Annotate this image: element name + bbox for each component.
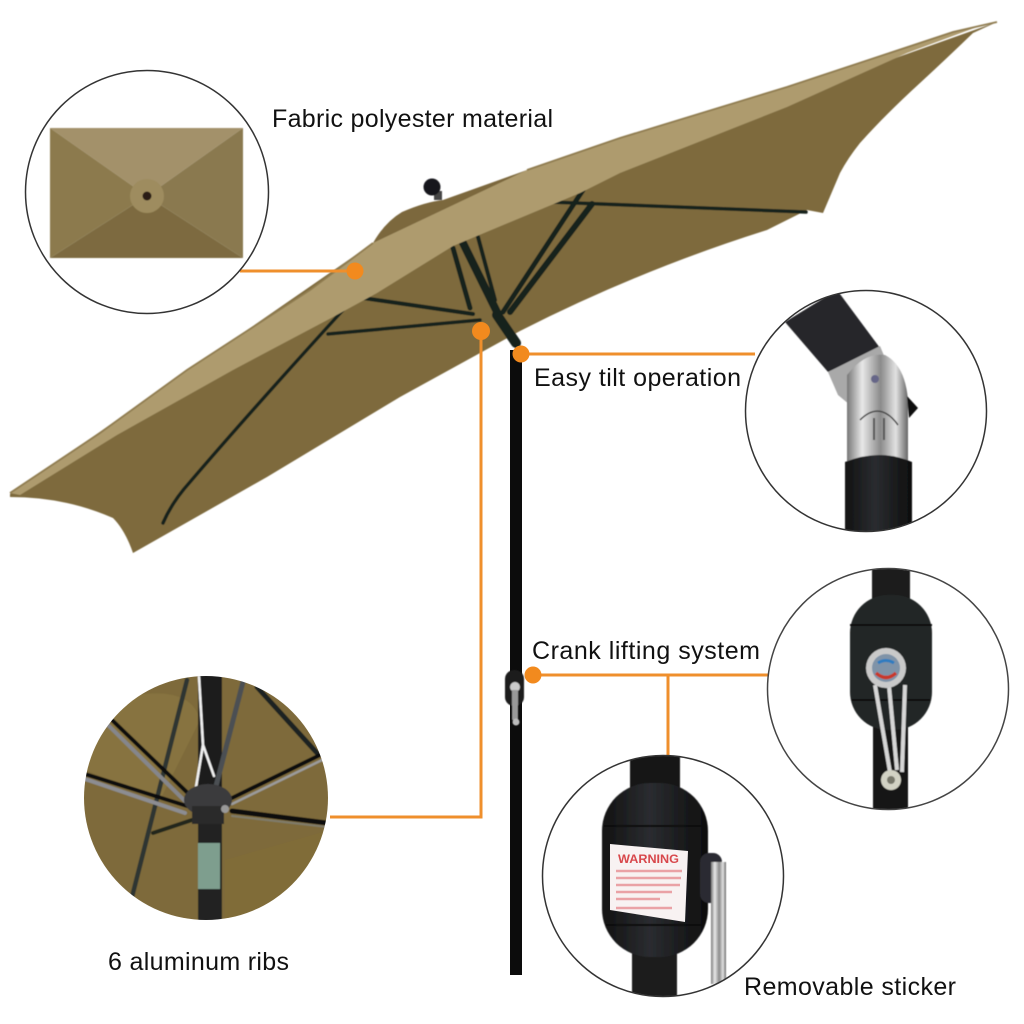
callout dots [346, 262, 542, 684]
callout lines [240, 271, 768, 817]
detail circle: tilt joint [746, 290, 986, 535]
pole [198, 676, 222, 788]
label: fabric: Fabric polyester material [272, 105, 553, 133]
hub [184, 784, 232, 816]
upper pole [785, 290, 880, 372]
ribs [85, 677, 327, 897]
label: tilt: Easy tilt operation [534, 364, 741, 392]
warning sticker: WARNING [618, 854, 679, 866]
detail circle: fabric canopy top view [26, 70, 268, 314]
detail circle: removable sticker [542, 750, 784, 1000]
detail circle: aluminum ribs [83, 672, 330, 930]
umbrella canopy [10, 22, 997, 553]
canopy vent knob [424, 178, 442, 200]
crank knob [866, 648, 906, 688]
canopy top edge band [10, 22, 997, 495]
silver joint [847, 355, 908, 462]
label: crank: Crank lifting system [532, 637, 760, 665]
pole [510, 350, 522, 975]
band upper shadow [10, 22, 997, 493]
warning sticker [610, 844, 688, 922]
canopy vent dome [373, 170, 540, 262]
label: sticker: Removable sticker [744, 973, 956, 1001]
canopy ribs [163, 190, 806, 523]
crank handle [875, 685, 905, 772]
collar [828, 346, 885, 405]
crank handle side [700, 853, 722, 903]
label: ribs: 6 aluminum ribs [108, 948, 289, 976]
detail circle: crank [768, 565, 1008, 810]
lower pole [845, 455, 912, 535]
crank housing [850, 595, 932, 730]
canopy underside [10, 22, 997, 553]
rope [196, 677, 214, 787]
lock tab [907, 396, 918, 418]
housing [602, 783, 708, 957]
crank on pole [505, 670, 524, 726]
